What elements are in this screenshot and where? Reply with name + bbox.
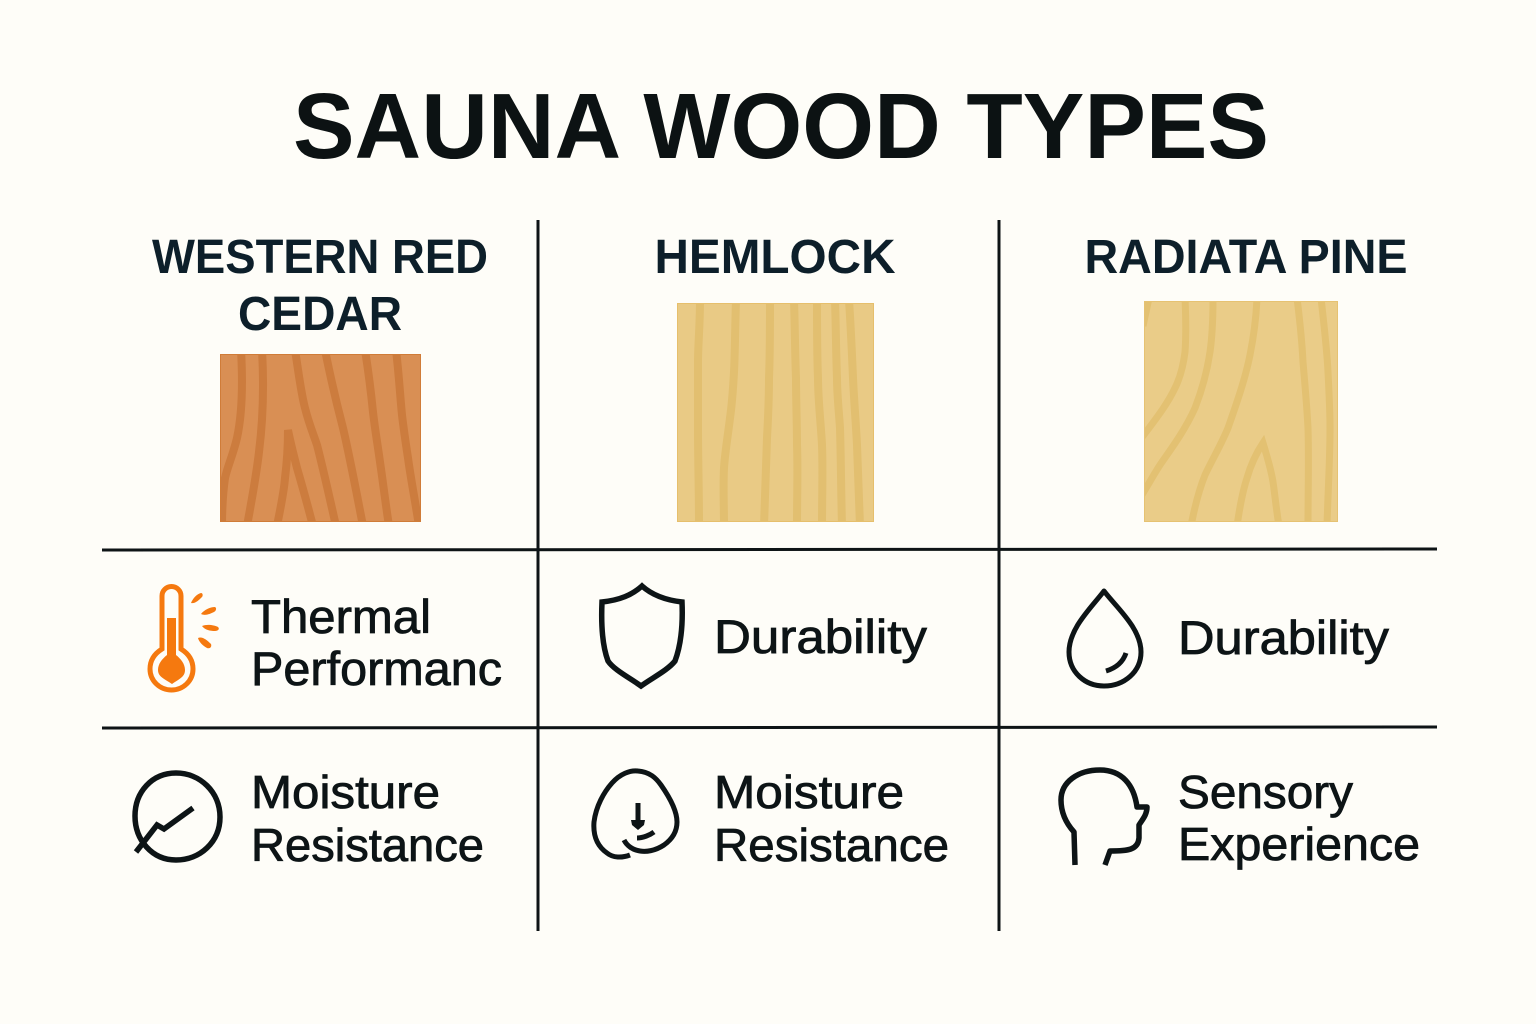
label: moisture resistance hemlock: Moisture	[714, 766, 904, 818]
label: sensory experience	[1178, 766, 1420, 870]
wood swatch: radiata pine	[1140, 298, 1338, 526]
icon: moisture drop face	[594, 771, 677, 857]
title: SAUNA WOOD TYPES	[293, 74, 1269, 178]
icon: water drop	[1069, 591, 1141, 686]
label: sensory experience: Sensory	[1178, 766, 1353, 818]
wood swatch: cedar	[220, 350, 421, 526]
label: sensory experience: Experience	[1178, 818, 1420, 870]
label: thermal performance: Performanc	[251, 642, 502, 695]
icon: moisture circle with line	[135, 773, 220, 860]
label: moisture resistance cedar: Resistance	[251, 819, 484, 871]
icon: head profile	[1061, 770, 1147, 865]
label: moisture resistance hemlock	[714, 766, 949, 871]
label: durability radiata: Durability	[1178, 611, 1390, 664]
heading: radiata pine: RADIATA PINE	[1084, 231, 1408, 284]
heading: western red cedar: WESTERN RED	[152, 231, 488, 284]
label: durability hemlock: Durability	[714, 610, 928, 663]
label: thermal performance: Thermal	[251, 590, 431, 643]
heading: western red cedar	[152, 231, 488, 341]
wood swatch: hemlock	[677, 300, 874, 526]
label: moisture resistance cedar	[251, 766, 484, 871]
icon: shield	[602, 586, 682, 686]
label: moisture resistance hemlock: Resistance	[714, 819, 949, 871]
icon: thermometer	[150, 586, 219, 690]
heading: hemlock: HEMLOCK	[654, 231, 896, 284]
label: thermal performance	[251, 590, 502, 695]
label: moisture resistance cedar: Moisture	[251, 766, 440, 818]
table grid lines	[102, 220, 1437, 931]
heading: western red cedar: CEDAR	[238, 288, 402, 341]
